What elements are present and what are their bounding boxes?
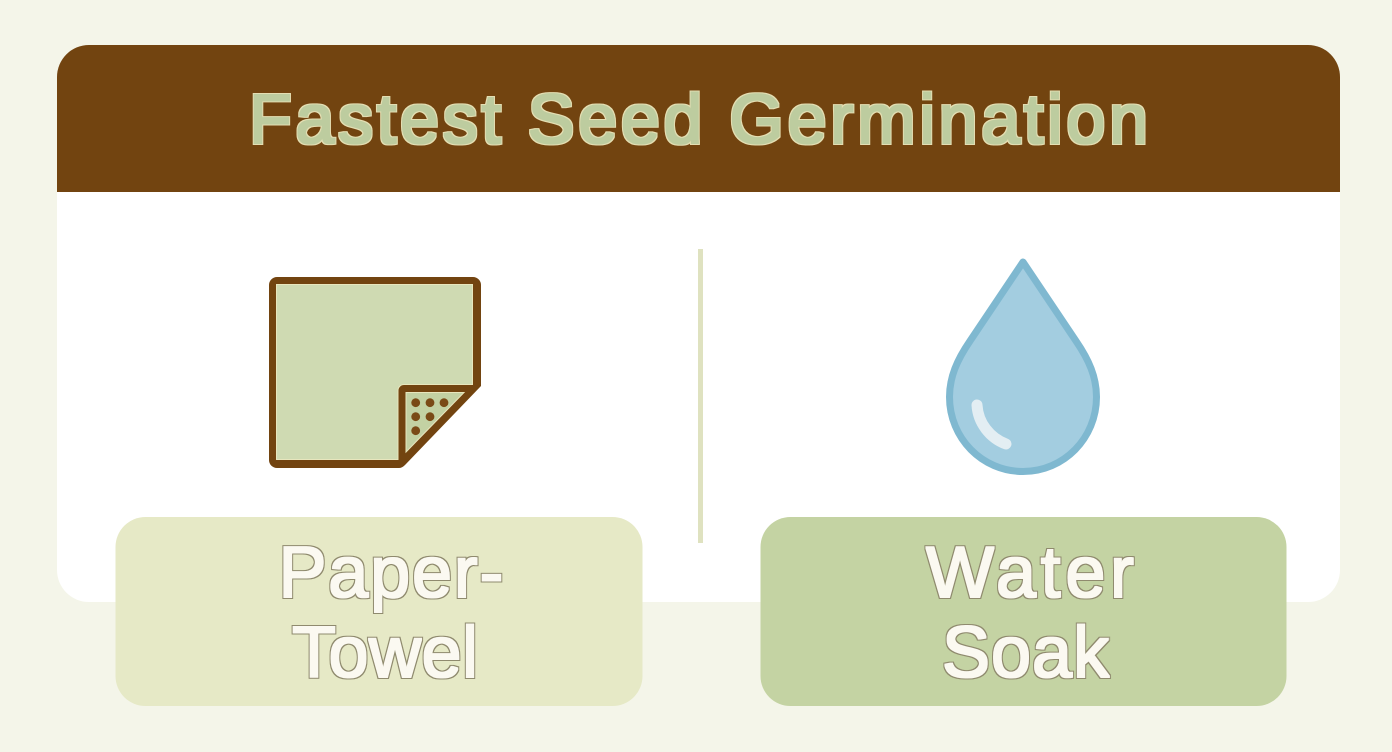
label text: Paper-Towel: Paper- bbox=[278, 533, 504, 613]
label text: Paper-Towel bbox=[278, 533, 504, 693]
panel: paper-towel label bbox=[116, 517, 642, 706]
icon: water drop bbox=[950, 262, 1096, 472]
icon: paper towel bbox=[269, 277, 481, 468]
panel: main card bbox=[57, 45, 1340, 602]
title: Fastest Seed Germination bbox=[249, 80, 1148, 158]
divider bbox=[698, 249, 703, 543]
panel: water soak label bbox=[760, 517, 1286, 706]
label text: Paper-Towel: Towel bbox=[292, 613, 478, 693]
label text: Water Soak bbox=[926, 533, 1134, 693]
label text: Water Soak: Water bbox=[926, 533, 1134, 613]
header banner bbox=[57, 45, 1340, 192]
label text: Water Soak: Soak bbox=[942, 613, 1110, 693]
